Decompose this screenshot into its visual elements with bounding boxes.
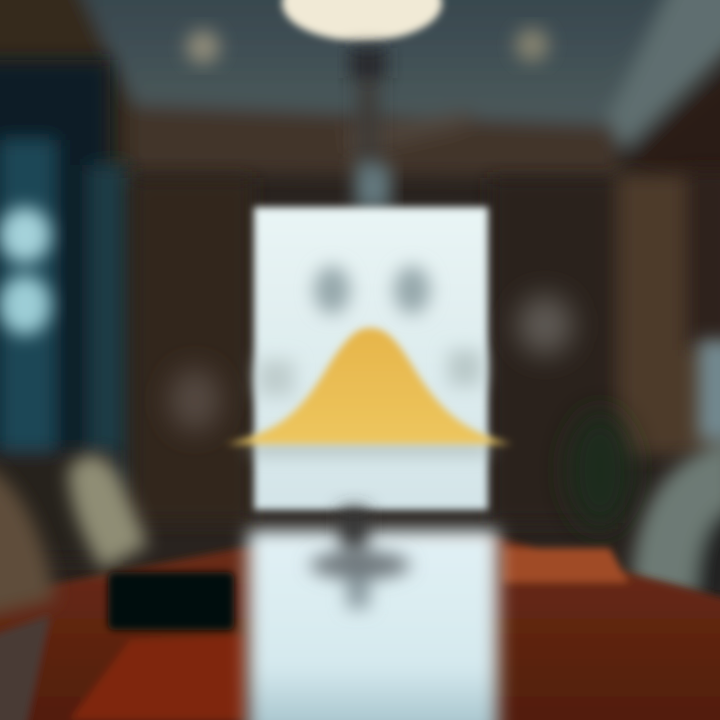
left chair — [0, 455, 148, 620]
table centerpiece — [310, 508, 410, 608]
ceiling lamp — [282, 0, 442, 41]
lamp stem — [350, 48, 391, 210]
curtains — [132, 170, 720, 523]
window reflection on table — [248, 530, 498, 720]
right edge objects — [632, 340, 720, 600]
bell curve chart — [225, 328, 512, 444]
central window — [254, 207, 488, 510]
window silhouettes — [250, 266, 490, 452]
left window highlights — [0, 207, 51, 335]
ceiling — [0, 0, 720, 200]
left wall and window — [0, 60, 128, 560]
table — [0, 538, 720, 720]
side figures — [169, 295, 634, 530]
black box on table — [108, 572, 234, 630]
ceiling spot lights — [186, 28, 549, 64]
